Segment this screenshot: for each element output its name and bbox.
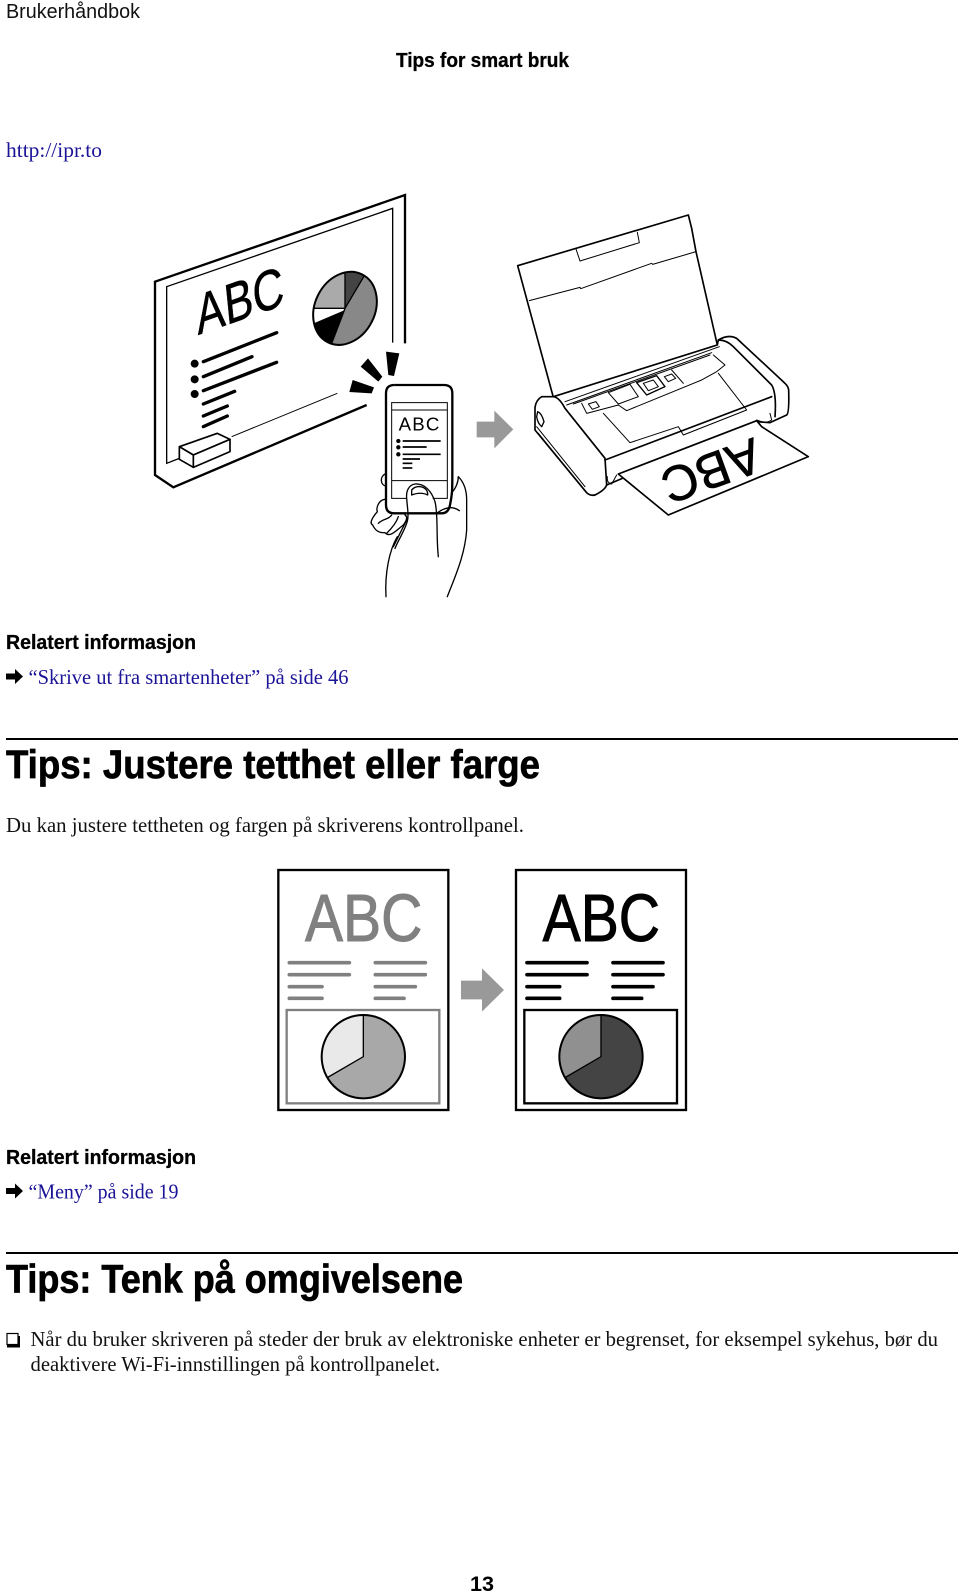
icon: checkbox bullet <box>7 1334 20 1348</box>
body text: Du kan justere tettheten og fargen på skriverens kontrollpanel. <box>6 813 524 837</box>
dark document <box>516 870 686 1110</box>
bullet text: deaktivere Wi-Fi-innstillingen på kontrollpanelet. <box>30 1352 440 1376</box>
light document heading: ABC <box>305 882 422 956</box>
dark document chart box <box>524 1010 677 1103</box>
whiteboard <box>155 195 405 487</box>
phone screen lines <box>397 440 441 468</box>
printed paper text: ABC <box>654 427 769 514</box>
arrow: phone to printer <box>477 411 513 448</box>
dark document heading: ABC <box>543 882 660 956</box>
illustration: whiteboard scanned by phone and printed <box>155 195 808 597</box>
arrow: before to after <box>461 968 504 1012</box>
light document <box>278 870 448 1110</box>
illustration: density before and after <box>278 870 686 1110</box>
whiteboard heading text: ABC <box>193 255 287 348</box>
icon: link arrow 1 <box>6 669 23 684</box>
light document chart box <box>287 1010 439 1103</box>
related link 2: “Meny” på side 19 <box>28 1180 178 1204</box>
printer <box>518 215 808 515</box>
running header: Brukerhåndbok <box>6 1 141 23</box>
phone screen text: ABC <box>399 414 439 435</box>
icon: camera flash rays <box>349 352 399 393</box>
eraser <box>179 433 230 467</box>
dark pie chart <box>558 1013 644 1100</box>
printer cover lid <box>518 215 717 397</box>
whiteboard text lines <box>192 333 277 427</box>
related link 1: “Skrive ut fra smartenheter” på side 46 <box>28 665 348 689</box>
related information heading 2: Relatert informasjon <box>6 1147 196 1169</box>
heading: adjust density or colour: Tips: Justere tetthet eller farge <box>6 743 540 787</box>
printed paper <box>618 421 808 515</box>
smartphone <box>386 385 452 513</box>
chapter title: Tips for smart bruk <box>396 50 570 72</box>
whiteboard pie chart <box>312 270 378 346</box>
icon: link arrow 2 <box>6 1184 23 1198</box>
dark document text lines <box>527 963 663 998</box>
light document text lines <box>289 963 425 998</box>
printer body <box>535 337 789 495</box>
heading: consider surroundings: Tips: Tenk på omgivelsene <box>6 1258 463 1302</box>
section rule 2 <box>6 1252 958 1254</box>
hand holding phone <box>371 474 467 597</box>
link: ipr.to: http://ipr.to <box>6 138 102 162</box>
related information heading 1: Relatert informasjon <box>6 632 196 654</box>
section rule 1 <box>6 738 958 740</box>
bullet text: Når du bruker skriveren på steder der bruk av elektroniske enheter er begrenset, for eksempel sykehus, bør du <box>30 1327 938 1351</box>
bullet text <box>30 1327 938 1376</box>
light pie chart <box>320 1013 407 1100</box>
